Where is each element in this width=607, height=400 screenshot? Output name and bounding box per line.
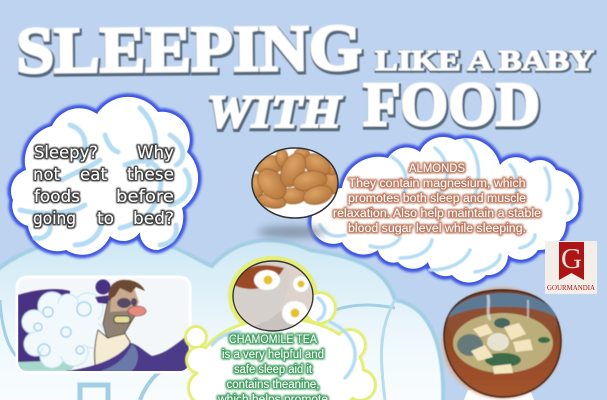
card: sleepy man xyxy=(17,277,190,372)
cloud swirls xyxy=(20,108,190,245)
title: SLEEPING: SLEEPING xyxy=(16,12,362,88)
almonds text: blood sugar level while sleeping. xyxy=(348,223,526,235)
blanket back xyxy=(18,289,70,371)
dream cloud xyxy=(22,292,105,368)
almonds text xyxy=(333,163,541,235)
almond plate shadow xyxy=(258,226,326,238)
chamomile text: CHAMOMILE TEA xyxy=(229,334,317,346)
man hair xyxy=(108,280,145,300)
cloud text: these xyxy=(127,165,174,185)
cloud text: foods xyxy=(34,187,80,207)
photo: miso soup xyxy=(442,287,562,399)
title: WITH: WITH xyxy=(207,86,343,138)
logo: Gourmandia: GOURMANDIA xyxy=(547,283,596,292)
chamomile text: safe sleep aid it xyxy=(234,364,313,376)
logo: Gourmandia: G xyxy=(561,243,582,275)
almonds text: ALMONDS xyxy=(409,163,465,175)
almonds text: promotes both sleep and muscle xyxy=(348,193,526,205)
cloud text: before xyxy=(116,187,174,207)
cloud text: going xyxy=(33,209,76,229)
man eye xyxy=(117,298,131,308)
man body xyxy=(95,330,130,368)
title xyxy=(16,11,595,141)
cloud swirls xyxy=(320,140,571,272)
cloud text: eat xyxy=(80,165,107,185)
title: SLEEPING: SLEEPING xyxy=(17,13,363,90)
man neck and jaw xyxy=(103,296,136,338)
cloud text: Sleepy? xyxy=(34,143,98,163)
cloud: almonds xyxy=(311,137,579,283)
box fragment xyxy=(80,385,108,400)
teal sheet xyxy=(18,360,74,371)
photo: almonds xyxy=(250,148,341,218)
cloud text: Why xyxy=(137,143,174,163)
title: LIKE A BABY: LIKE A BABY xyxy=(376,46,595,78)
cloud: chamomile tea xyxy=(187,259,374,400)
chamomile text: contains theanine, xyxy=(226,379,320,391)
title: FOOD: FOOD xyxy=(364,73,541,141)
cloud text xyxy=(33,143,174,229)
man nose xyxy=(128,306,146,316)
chamomile text xyxy=(217,334,328,400)
cloud text: not xyxy=(33,165,60,185)
photo: chamomile tea xyxy=(233,261,320,335)
cloud text: bed? xyxy=(133,209,174,229)
logo: Gourmandia xyxy=(545,241,597,294)
title: FOOD: FOOD xyxy=(363,71,540,139)
title: WITH: WITH xyxy=(208,88,344,140)
title: LIKE A BABY: LIKE A BABY xyxy=(375,45,594,77)
pillow knob xyxy=(96,280,110,294)
cloud text: to xyxy=(97,209,114,229)
man forehead xyxy=(110,288,139,312)
man mouth xyxy=(114,316,130,323)
background cloud xyxy=(0,235,443,400)
fragment below soup xyxy=(464,390,534,400)
front blanket xyxy=(66,335,190,372)
almonds text: They contain magnesium, which xyxy=(348,178,526,190)
cloud: sleepy question xyxy=(11,97,198,255)
chamomile text: is a very helpful and xyxy=(222,349,324,361)
almonds text: relaxation. Also help maintain a stable xyxy=(333,208,541,220)
